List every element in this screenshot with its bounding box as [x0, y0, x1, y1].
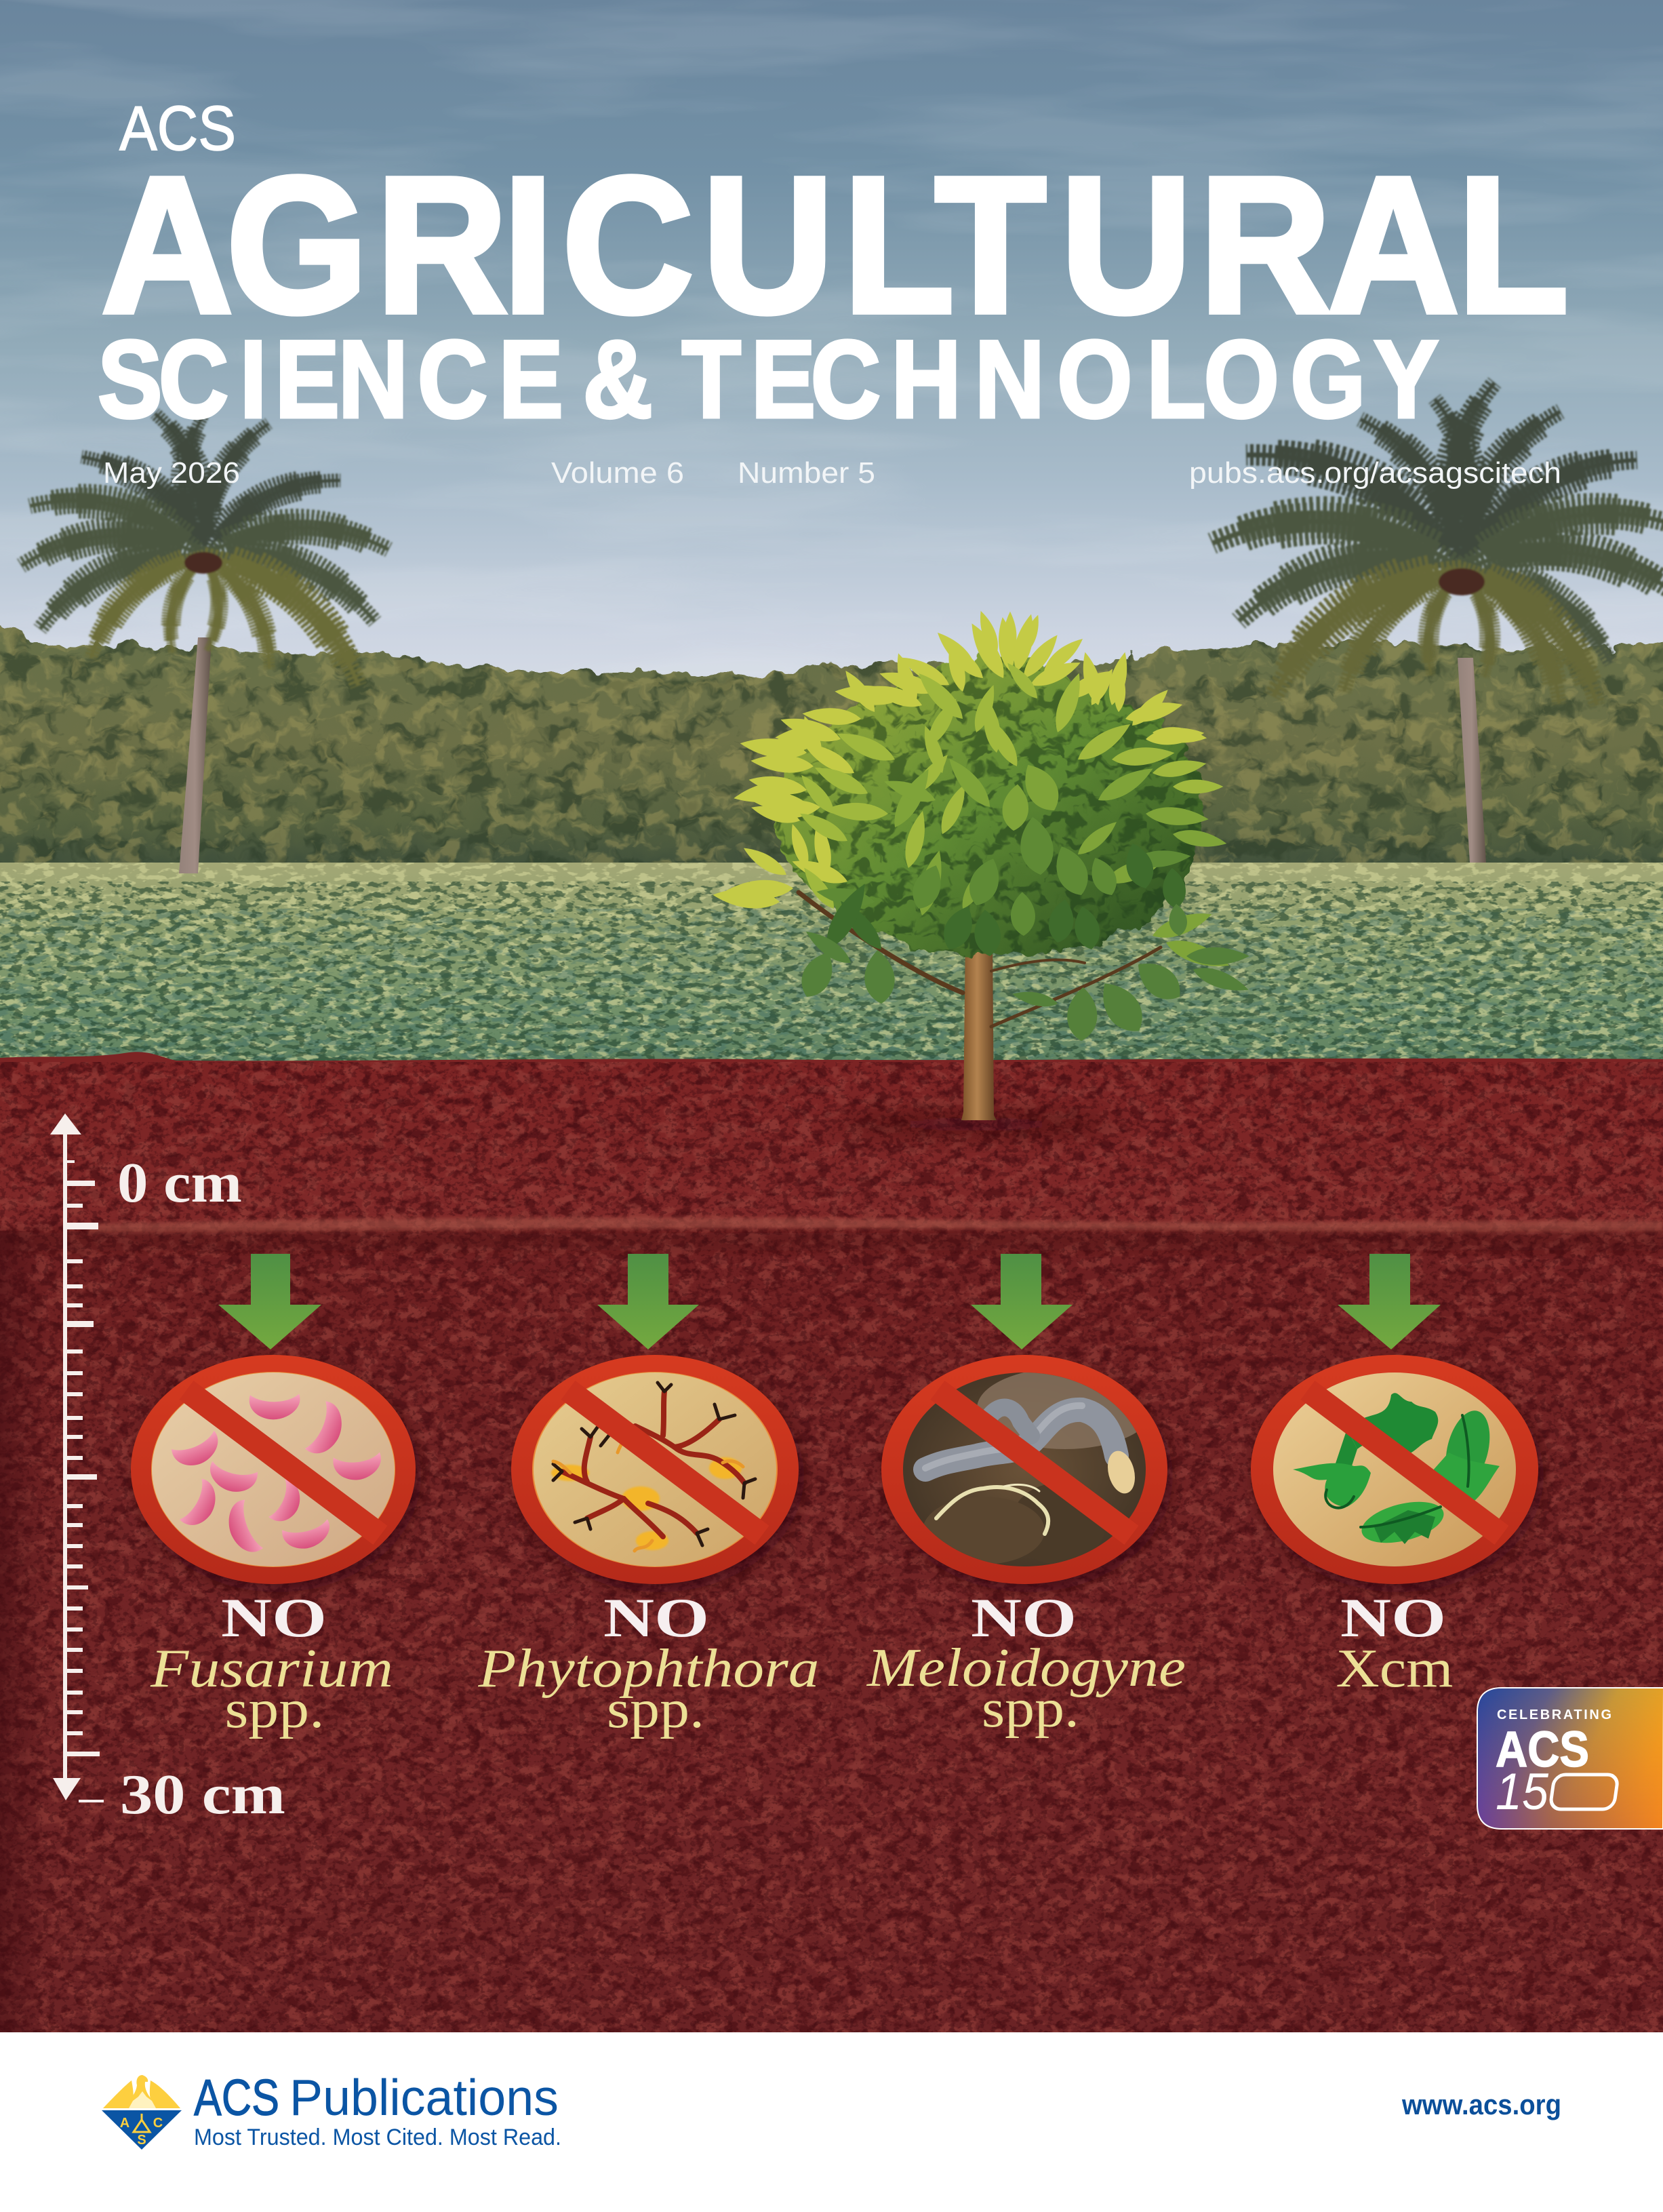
- crop field: [0, 863, 1663, 1066]
- fusarium spores: [170, 1394, 383, 1558]
- label: no Fusarium spp.: NO: [221, 1587, 327, 1648]
- tree leaves: [712, 609, 1251, 1042]
- icon: ACS eagle logo: [102, 2075, 182, 2150]
- ruler label 0 cm: 0 cm: [117, 1151, 242, 1214]
- label: no Fusarium spp.: spp.: [225, 1680, 324, 1739]
- depth ruler: [50, 1113, 104, 1802]
- ACS Publications wordmark: [194, 2069, 561, 2150]
- nematode worm: [925, 1406, 1117, 1534]
- label: no Meloidogyne spp.: spp.: [982, 1679, 1079, 1739]
- badge: Celebrating ACS 150: ACS: [1496, 1721, 1589, 1777]
- sky background: [0, 0, 1663, 692]
- badge: Celebrating ACS 150: 15: [1496, 1763, 1549, 1821]
- ACS Publications wordmark: ACS: [194, 2069, 279, 2126]
- label: no Phytophthora spp.: [477, 1587, 819, 1739]
- label: no Fusarium spp.: [150, 1587, 393, 1739]
- label: no Fusarium spp.: Fusarium: [150, 1639, 393, 1699]
- issue information line: Number 5: [738, 456, 875, 490]
- label: no Phytophthora spp.: spp.: [607, 1680, 704, 1739]
- green bacteria leaf forms: [1293, 1393, 1500, 1550]
- label: no Xcm: [1336, 1587, 1454, 1699]
- hyphae network: [551, 1383, 755, 1551]
- tree crown mass: [774, 654, 1203, 955]
- ruler label 30 cm: 30 cm: [120, 1763, 285, 1826]
- footer panel: [0, 2032, 1663, 2212]
- icon: no Meloidogyne: [881, 1355, 1173, 1592]
- ACS Publications wordmark: Most Trusted. Most Cited. Most Read.: [194, 2125, 561, 2150]
- website address: www.acs.org: [1401, 2089, 1561, 2120]
- distant forest treeline: [0, 625, 1663, 888]
- icon: no Xcm: [1251, 1355, 1544, 1592]
- palm tree left: [20, 406, 388, 873]
- badge: Celebrating ACS 150: CELEBRATING: [1497, 1707, 1611, 1722]
- soil ground: [0, 1052, 1663, 2032]
- icon: no Fusarium: [131, 1355, 421, 1592]
- Science and Technology wordmark: SCIENCE & TECHNOLOGY: [98, 319, 1439, 441]
- icon: ACS eagle logo: A: [120, 2116, 129, 2131]
- arrow 2: [597, 1254, 699, 1349]
- icon: ACS eagle logo: S: [137, 2133, 146, 2148]
- palm tree right: [1212, 378, 1663, 863]
- issue information line: Volume 6: [551, 456, 684, 490]
- badge: Celebrating ACS 150: [1477, 1688, 1663, 1829]
- ACS Publications wordmark: Publications: [289, 2069, 559, 2126]
- label: no Phytophthora spp.: Phytophthora: [477, 1639, 819, 1699]
- arrow 1: [218, 1254, 321, 1349]
- arrow 3: [971, 1254, 1073, 1349]
- icon: no Phytophthora: [511, 1355, 804, 1592]
- label: no Meloidogyne spp.: NO: [971, 1587, 1077, 1648]
- tree trunk: [961, 936, 997, 1120]
- arrow 4: [1338, 1254, 1441, 1349]
- label: no Phytophthora spp.: NO: [603, 1587, 709, 1648]
- journal title block: [98, 93, 1569, 441]
- AGRICULTURAL wordmark: AGRICULTURAL: [101, 136, 1569, 353]
- issue information line: pubs.acs.org/acsagscitech: [1189, 456, 1561, 490]
- tree branches: [799, 892, 1161, 1027]
- icon: ACS eagle logo: C: [153, 2116, 163, 2131]
- central young tree: [712, 609, 1251, 1134]
- label: no Xcm: Xcm: [1336, 1639, 1454, 1699]
- ACS label: ACS: [119, 93, 236, 163]
- label: no Meloidogyne spp.: Meloidogyne: [866, 1638, 1186, 1698]
- nematode head: [1104, 1448, 1139, 1497]
- label: no Xcm: NO: [1340, 1587, 1446, 1648]
- issue information line: May 2026: [103, 456, 240, 490]
- label: no Meloidogyne spp.: [866, 1587, 1186, 1739]
- issue information line: [103, 456, 1561, 490]
